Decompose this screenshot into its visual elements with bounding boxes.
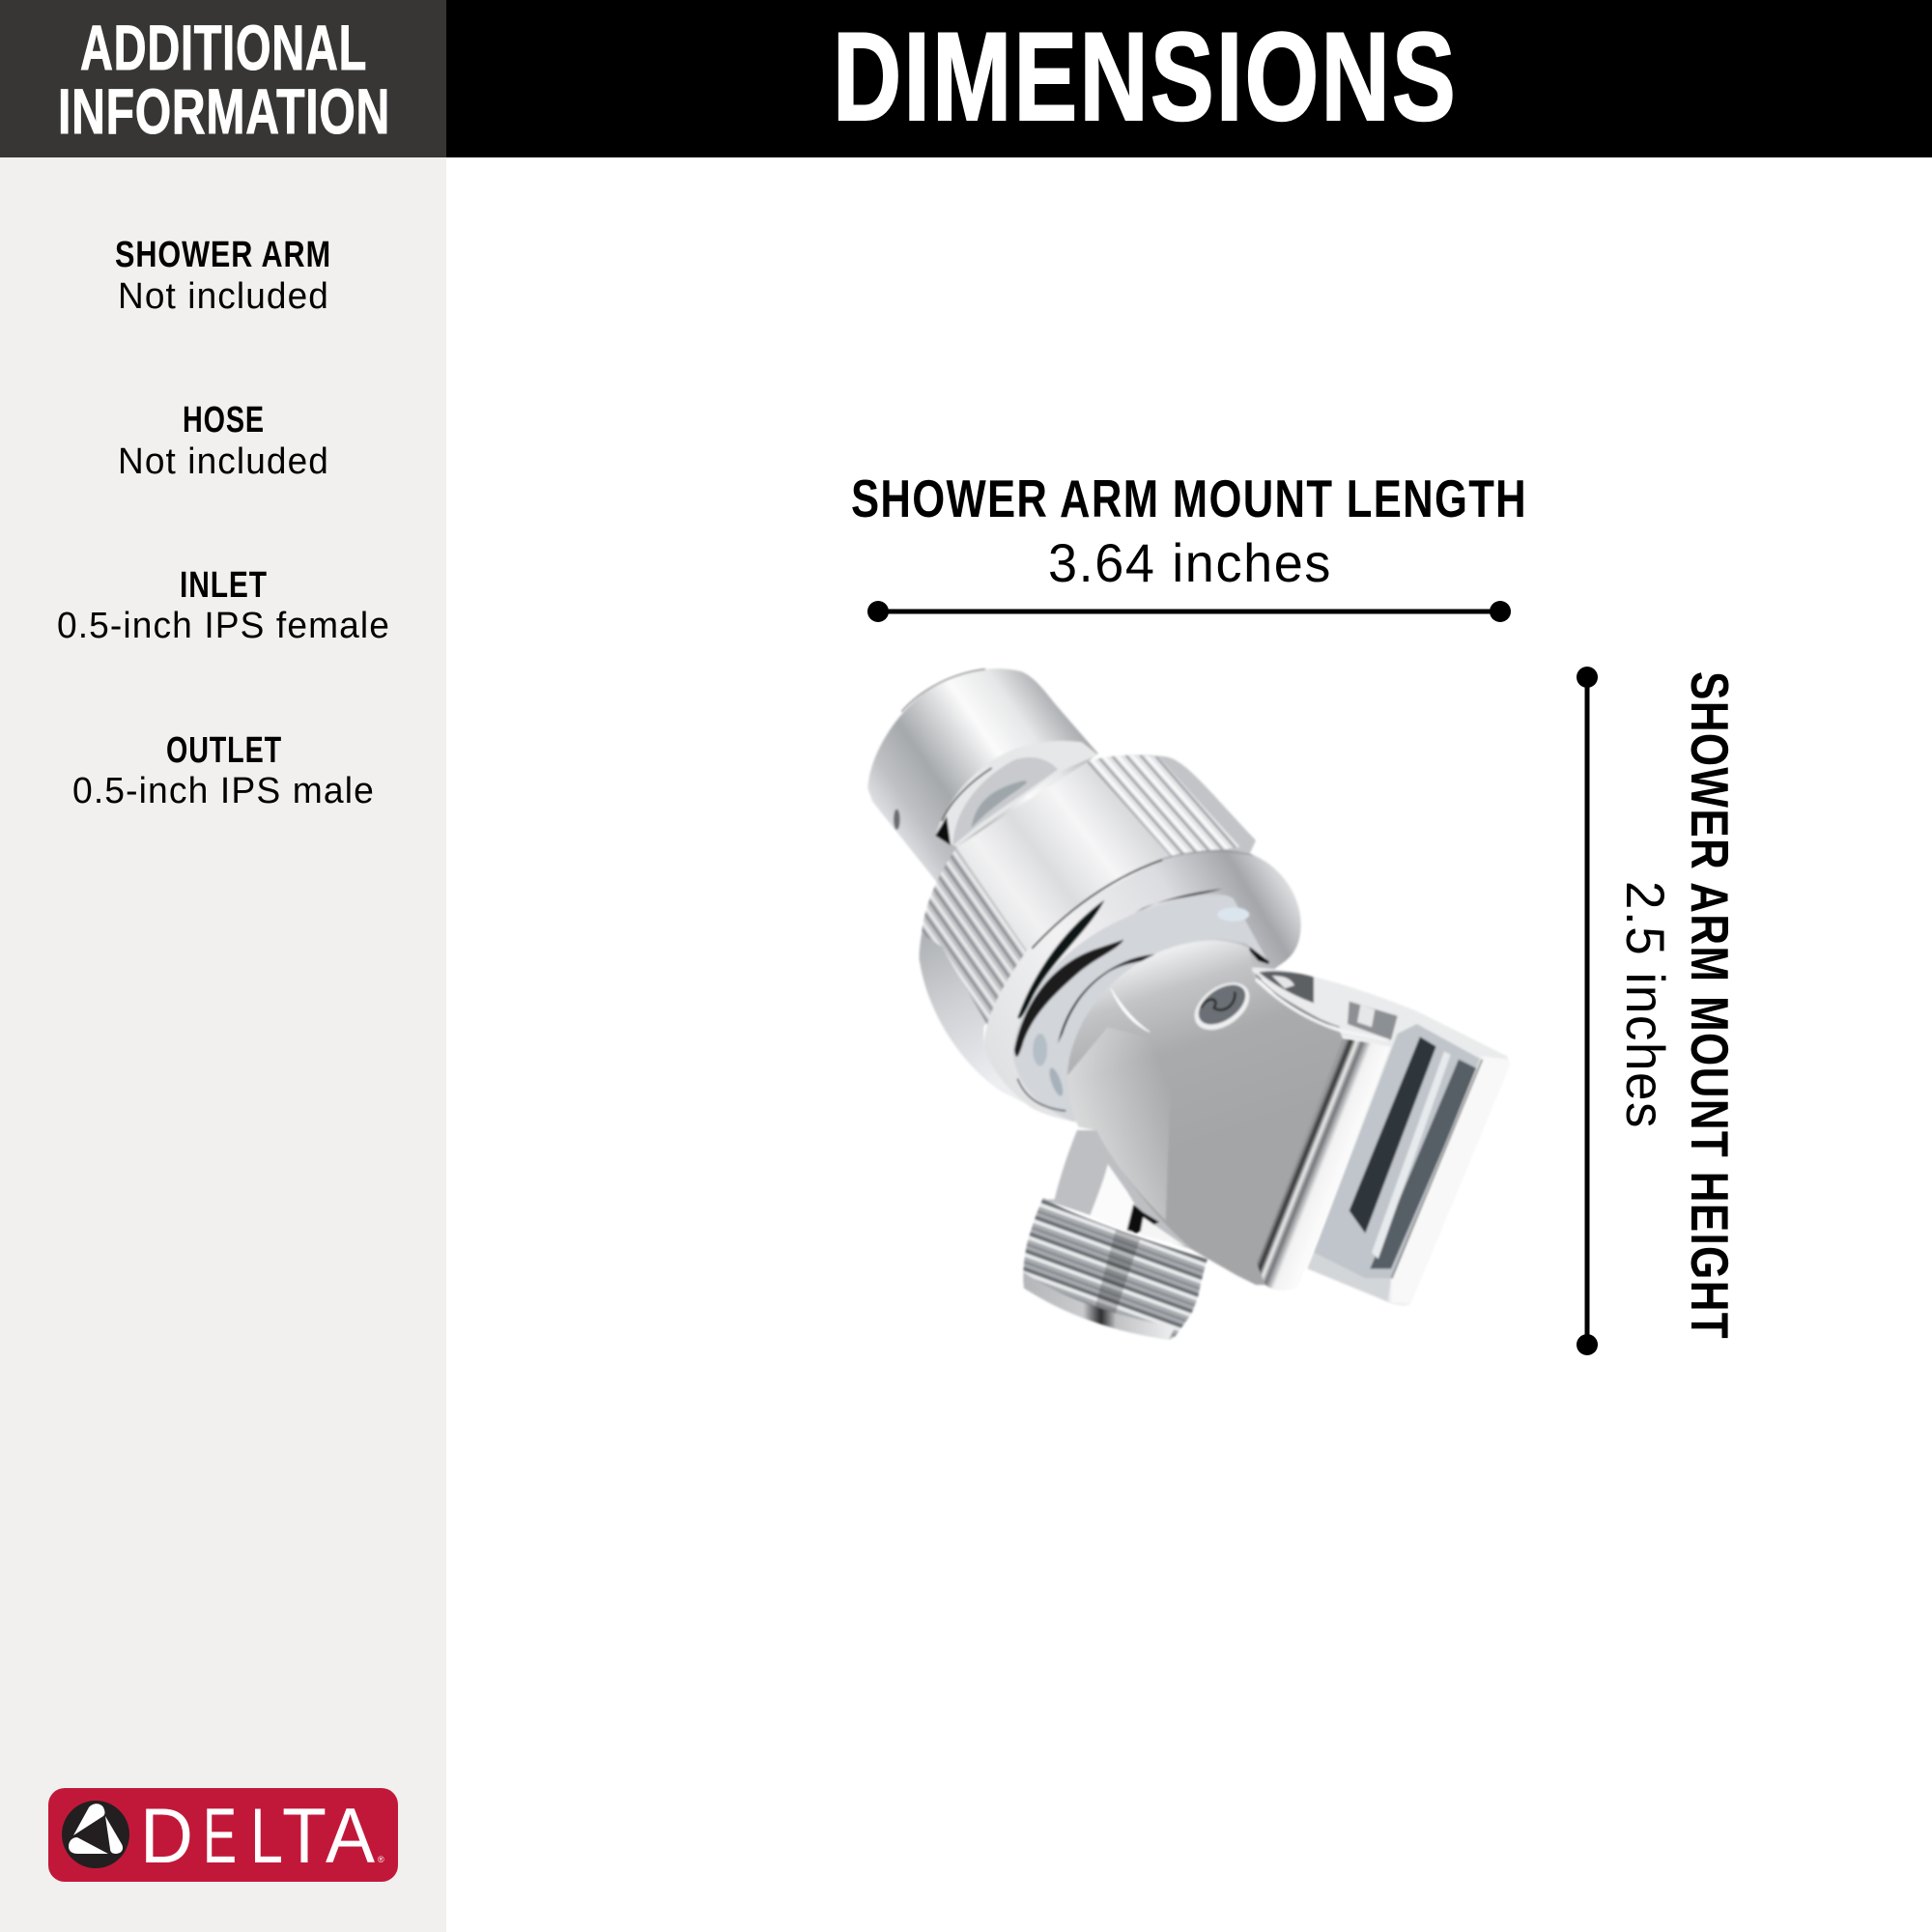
panel: sidebar (0, 0, 446, 1932)
title bar: DIMENSIONS (833, 6, 1458, 147)
spec: hose: HOSE (183, 400, 265, 440)
outlet neck and thread (1023, 1130, 1208, 1340)
height dimension label: 2.5 inches (1615, 881, 1676, 1129)
sidebar heading: INFORMATION (58, 75, 390, 147)
height dimension label (1615, 671, 1740, 1340)
flange inner ring (1012, 895, 1268, 1122)
title bar (446, 0, 1932, 157)
cap (867, 668, 1098, 882)
upper neck (935, 741, 1098, 847)
spec: outlet (72, 730, 375, 811)
flange (983, 849, 1301, 1122)
length dimension line (867, 601, 1511, 622)
logo: Delta: A (326, 1793, 375, 1880)
sidebar heading (0, 0, 446, 157)
spec: shower arm: Not included (118, 276, 329, 317)
spec: hose: Not included (118, 441, 329, 482)
mount plate (1067, 941, 1391, 1290)
logo: Delta: T (282, 1793, 327, 1880)
plate highlight (1111, 988, 1150, 1032)
collar left ribs (922, 847, 1030, 1027)
spec: outlet: 0.5-inch IPS male (72, 771, 375, 811)
collar (956, 755, 1256, 988)
height dimension line (1577, 667, 1598, 1355)
spec: shower arm: SHOWER ARM (115, 235, 331, 275)
spec: inlet (57, 565, 390, 646)
logo: Delta: ® (378, 1855, 384, 1864)
logo: Delta: D (140, 1793, 193, 1880)
collar lower body (920, 848, 1031, 1104)
sidebar heading: ADDITIONAL (80, 12, 367, 83)
spec: hose (118, 400, 329, 482)
spec: inlet: 0.5-inch IPS female (57, 606, 390, 646)
clip body (1246, 968, 1510, 1305)
height dimension label: SHOWER ARM MOUNT HEIGHT (1680, 671, 1740, 1340)
length dimension label: SHOWER ARM MOUNT LENGTH (851, 469, 1527, 528)
plate bright edge (1186, 973, 1391, 1290)
product: shower arm mount (867, 668, 1510, 1340)
length dimension label: 3.64 inches (1048, 532, 1332, 593)
length dimension label (851, 469, 1527, 593)
spec: inlet: INLET (180, 565, 268, 606)
logo: Delta (48, 1788, 398, 1882)
spec: outlet: OUTLET (166, 730, 282, 771)
collar right ribs (1087, 755, 1239, 858)
logo: Delta: L (250, 1793, 283, 1880)
hole (1186, 973, 1258, 1039)
logo: Delta: E (203, 1793, 237, 1880)
spec: shower arm (115, 235, 331, 317)
